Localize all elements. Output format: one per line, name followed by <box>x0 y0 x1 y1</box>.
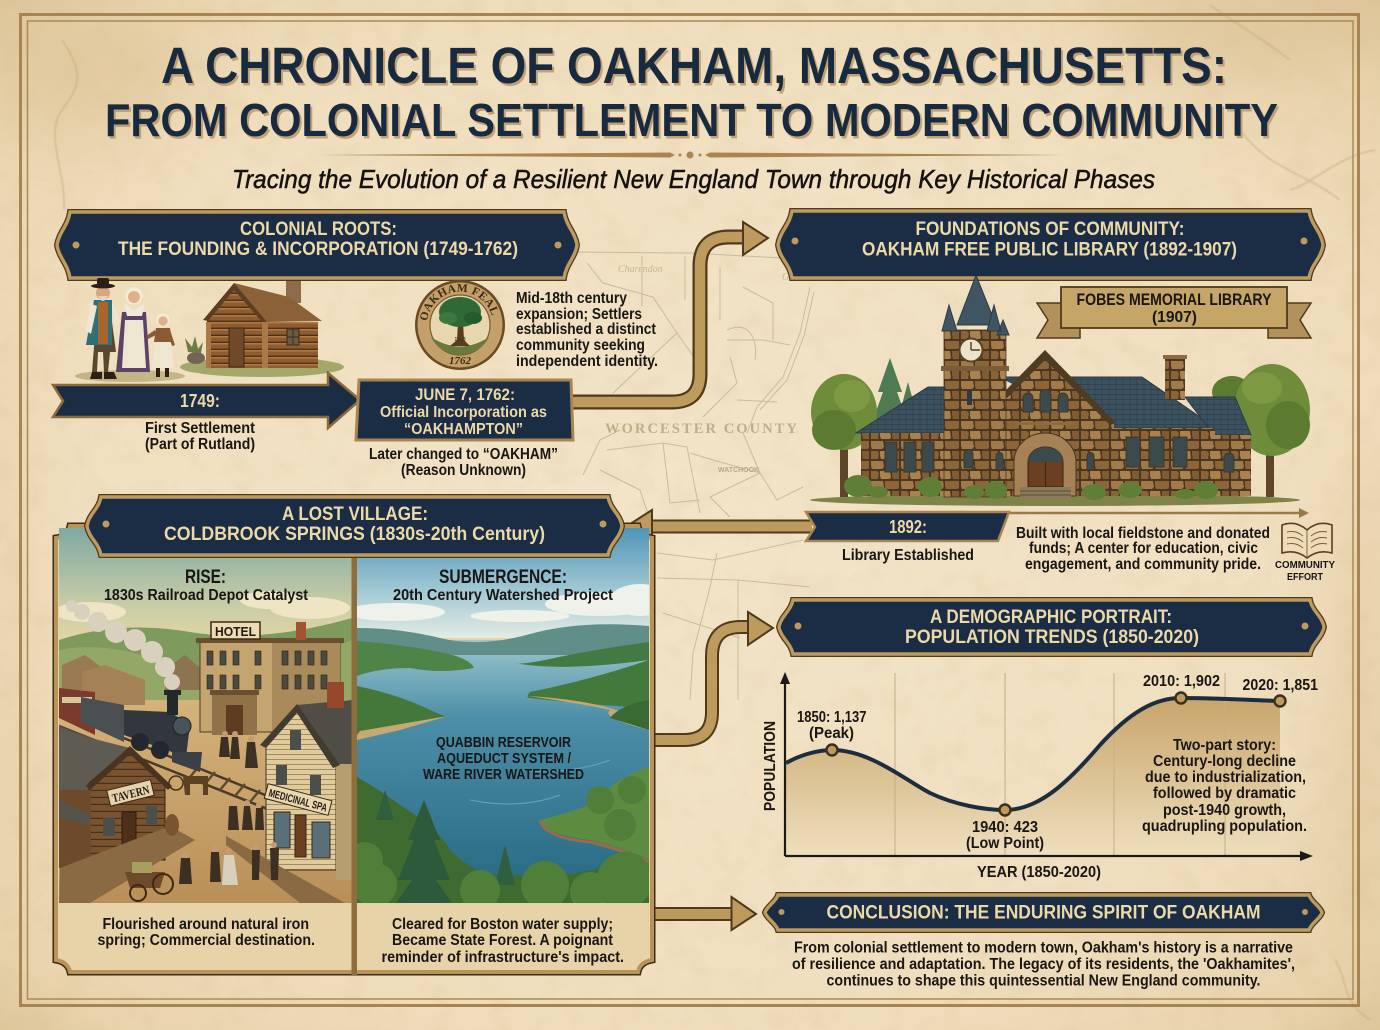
scene: rise of the village <box>54 528 352 903</box>
heading banner: demographic portrait <box>779 600 1324 654</box>
text: mid-18th century note: expansion; Settlers <box>516 306 642 323</box>
heading banner: colonial roots: COLONIAL ROOTS: <box>240 218 397 240</box>
text: submergence caption: Became State Forest. A poignant <box>392 932 613 949</box>
text: submergence heading <box>393 567 613 604</box>
tavern <box>59 726 92 738</box>
text: later changed <box>369 446 558 479</box>
icon: open book community effort: EFFORT <box>1287 571 1323 583</box>
connector arrow: roots to library <box>570 222 768 402</box>
heading banner: conclusion <box>765 895 1322 930</box>
title <box>105 37 1280 148</box>
text: rise caption <box>98 916 315 949</box>
text: conclusion body: From colonial settlement to modern town, Oakham's history is a narrative <box>794 940 1293 956</box>
text: rise caption: spring; Commercial destination. <box>98 932 315 949</box>
chart: population trend: 2020: 1,851 <box>1242 677 1318 694</box>
illustration: Fobes Memorial Library building <box>810 275 1310 506</box>
text: two-part story: due to industrialization, <box>1145 769 1306 786</box>
scene: rise of the village: MEDICINAL SPA <box>267 787 328 815</box>
walls <box>861 433 946 496</box>
icon: Oakham seal: 1762 <box>449 355 472 367</box>
heading banner: demographic portrait: A DEMOGRAPHIC PORTRAIT: <box>930 606 1172 628</box>
faint county map background: Gilbertville <box>782 272 829 283</box>
title: A CHRONICLE OF OAKHAM, MASSACHUSETTS: <box>163 40 1229 96</box>
heading banner: foundations of community: OAKHAM FREE PUBLIC LIBRARY (1892-1907) <box>862 238 1237 260</box>
heading banner: colonial roots <box>57 212 577 278</box>
chart: population trend: POPULATION <box>762 721 779 811</box>
title: A CHRONICLE OF OAKHAM, MASSACHUSETTS: <box>161 37 1227 94</box>
title ornament <box>319 152 1064 158</box>
icon: Oakham seal <box>415 280 505 370</box>
background houses <box>62 655 100 690</box>
text: reservoir label: WARE RIVER WATERSHED <box>423 767 584 783</box>
text: later changed: (Reason Unknown) <box>401 462 526 479</box>
title: FROM COLONIAL SETTLEMENT TO MODERN COMMUNITY <box>107 96 1280 148</box>
text: library description: engagement, and community pride. <box>1025 556 1261 573</box>
timeline tag: 1892 library established: 1892: <box>889 517 927 537</box>
title: FROM COLONIAL SETTLEMENT TO MODERN COMMUNITY <box>105 94 1278 146</box>
illustration: log cabin <box>180 281 344 377</box>
horse, wagon and figures <box>183 776 208 795</box>
medicinal spa <box>298 700 352 764</box>
text: library description: Built with local fieldstone and donated <box>1016 525 1270 542</box>
panel: foundations of community <box>778 211 1335 583</box>
illustration: settler family <box>75 278 185 382</box>
text: first settlement <box>145 420 255 453</box>
box: June 7 1762 incorporation: JUNE 7, 1762: <box>415 386 515 404</box>
text: mid-18th century note: independent identity. <box>516 353 658 370</box>
faint county map background <box>570 252 829 700</box>
text: two-part story: post-1940 growth, <box>1163 802 1286 819</box>
scene: rise of the village: HOTEL <box>215 624 256 639</box>
ribbon: Fobes Memorial Library 1907: FOBES MEMORIAL LIBRARY <box>1076 291 1272 309</box>
heading banner: lost village: COLDBROOK SPRINGS (1830s-20th Century) <box>164 523 545 545</box>
chart: population trend: (Peak) <box>809 725 854 742</box>
timeline arrow: 1749 first settlement <box>53 373 360 428</box>
timeline tag: 1892 library established <box>806 508 1309 564</box>
train <box>59 688 95 735</box>
text: rise heading <box>104 567 308 604</box>
text: two-part story: quadrupling population. <box>1142 818 1307 835</box>
text: first settlement: (Part of Rutland) <box>145 436 255 453</box>
panel: lost village Coldbrook Springs <box>54 497 670 975</box>
icon: open book community effort <box>1275 523 1335 583</box>
timeline tag: 1892 library established: Library Established <box>842 547 974 564</box>
text: two-part story: followed by dramatic <box>1153 785 1296 802</box>
hotel <box>200 640 340 732</box>
text: conclusion body: of resilience and adaptation. The legacy of its residents, the 'Oakhamites', <box>792 956 1295 973</box>
panel: demographic portrait <box>762 600 1324 881</box>
text: submergence caption <box>382 916 624 966</box>
text: mid-18th century note: Mid-18th century <box>516 290 627 307</box>
scene: rise of the village: TAVERN <box>111 782 151 805</box>
chart: population trend: YEAR (1850-2020) <box>977 864 1101 881</box>
text: later changed: Later changed to “OAKHAM” <box>369 446 558 463</box>
text: conclusion body <box>792 940 1295 990</box>
timeline arrow: 1749 first settlement: 1749: <box>180 391 220 411</box>
heading banner: conclusion: CONCLUSION: THE ENDURING SPIRIT OF OAKHAM <box>826 902 1260 924</box>
chart: population trend: 1940: 423 <box>972 819 1038 836</box>
subtitle: Tracing the Evolution of a Resilient New England Town through Key Historical Phases <box>232 164 1155 194</box>
text: submergence caption: reminder of infrastructure's impact. <box>382 949 624 966</box>
connector arrow: library to lost village <box>627 510 812 542</box>
icon: Oakham seal: 1953 <box>454 337 466 343</box>
track <box>59 725 266 810</box>
chart: population trend: (Low Point) <box>966 835 1044 852</box>
chart: population trend <box>762 672 1318 881</box>
ribbon: Fobes Memorial Library 1907: (1907) <box>1152 309 1197 326</box>
text: mid-18th century note: established a distinct <box>516 321 656 338</box>
shrubs <box>844 475 1218 500</box>
text: two-part story: Two-part story: <box>1173 737 1276 754</box>
heading banner: colonial roots: THE FOUNDING & INCORPORATION (1749-1762) <box>118 238 518 260</box>
text: conclusion body: continues to shape this quintessential New England community. <box>826 972 1260 990</box>
ribbon: Fobes Memorial Library 1907 <box>1037 287 1311 338</box>
panel: colonial roots <box>50 209 658 512</box>
panel frame <box>56 526 652 972</box>
text: two-part story <box>1142 737 1307 835</box>
text: submergence heading: SUBMERGENCE: <box>439 567 567 588</box>
heading banner: demographic portrait: POPULATION TRENDS (1850-2020) <box>905 626 1199 648</box>
heading banner: foundations of community <box>778 211 1323 278</box>
scene: submerged reservoir <box>357 528 649 903</box>
divider between scenes <box>352 555 357 975</box>
text: rise heading: 1830s Railroad Depot Catalyst <box>104 587 308 604</box>
tower <box>944 330 1006 497</box>
windows <box>885 390 1234 472</box>
text: submergence heading: 20th Century Watershed Project <box>393 587 613 604</box>
text: submergence caption: Cleared for Boston water supply; <box>392 916 613 933</box>
box: June 7 1762 incorporation: “OAKHAMPTON” <box>404 421 523 438</box>
door arch <box>1014 433 1076 496</box>
heading banner: foundations of community: FOUNDATIONS OF COMMUNITY: <box>916 218 1184 240</box>
faint county map background: Charendon <box>618 264 663 275</box>
roofs <box>856 387 950 433</box>
box: June 7 1762 incorporation <box>356 380 573 440</box>
icon: Oakham seal: OAKHAM FEAL <box>420 284 498 320</box>
text: library description: funds; A center for education, civic <box>1029 540 1258 557</box>
chart: population trend: 2010: 1,902 <box>1143 673 1220 690</box>
text: rise caption: Flourished around natural iron <box>102 916 309 933</box>
box: June 7 1762 incorporation: Official Incorporation as <box>380 404 547 421</box>
connector arrow: lost village to conclusion <box>654 897 756 930</box>
text: mid-18th century note <box>516 290 658 370</box>
text: two-part story: Century-long decline <box>1153 753 1296 770</box>
text: reservoir label: QUABBIN RESERVOIR <box>436 735 571 751</box>
text: reservoir label <box>423 735 584 783</box>
smoke <box>66 600 180 690</box>
connector arrow: lost village to demographics <box>652 612 773 740</box>
text: reservoir label: AQUEDUCT SYSTEM / <box>437 751 571 767</box>
trees <box>873 358 907 420</box>
heading banner: lost village <box>87 497 622 555</box>
text: library description <box>1016 525 1270 573</box>
icon: open book community effort: COMMUNITY <box>1275 559 1335 571</box>
text: first settlement: First Settlement <box>145 420 255 437</box>
text: rise heading: RISE: <box>185 567 226 588</box>
chart: population trend: 1850: 1,137 <box>797 709 866 726</box>
text: mid-18th century note: community seeking <box>516 337 645 354</box>
faint county map background: WORCESTER COUNTY <box>605 421 798 437</box>
faint county map background: WATCHOOK <box>718 467 759 474</box>
heading banner: lost village: A LOST VILLAGE: <box>282 503 428 525</box>
panel: conclusion <box>765 895 1322 990</box>
